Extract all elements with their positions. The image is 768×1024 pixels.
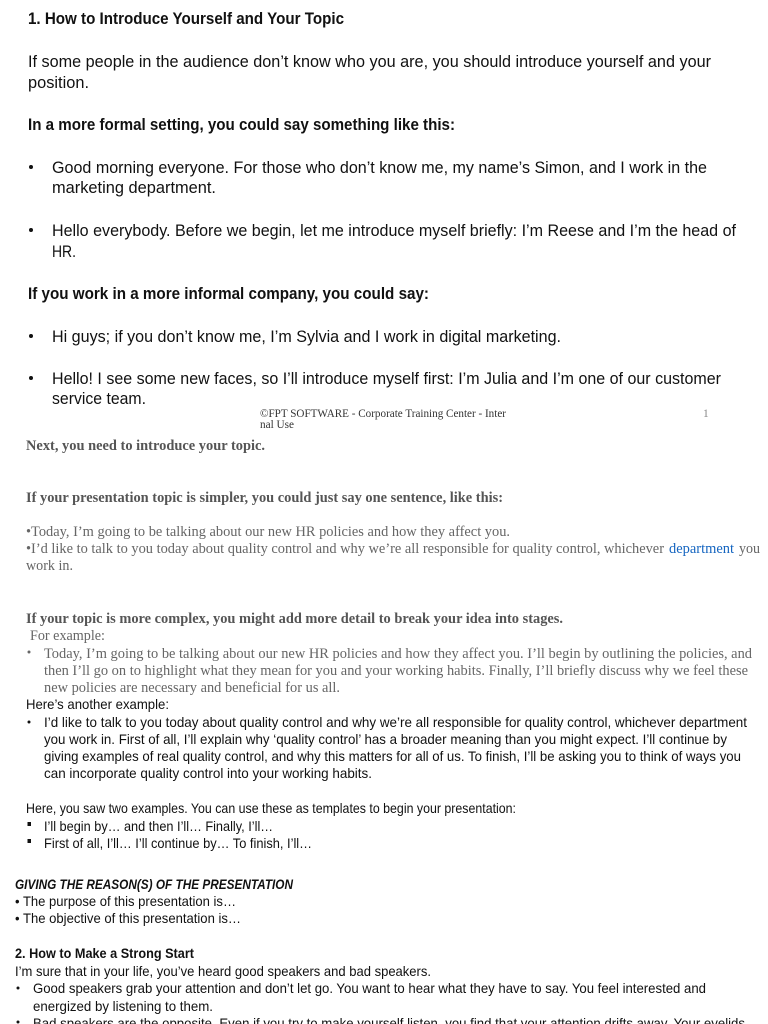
section: introducing yourself: Hi guys; if you don’t know me, I’m Sylvia and I work in digital marketing. (52, 328, 561, 346)
section: introducing yourself: HR. (52, 243, 76, 261)
section: introducing yourself: If you work in a more informal company, you could say: (28, 285, 429, 303)
section: simple topic introduction: •Today, I’m going to be talking about our new HR policies and how they affect you. (26, 524, 510, 540)
section: simple topic introduction: department (669, 541, 735, 557)
page footer: ©FPT SOFTWARE - Corporate Training Center - Inter (260, 408, 506, 420)
section: introducing yourself: service team. (52, 390, 146, 408)
section: simple topic introduction: If your presentation topic is simpler, you could just say one sentence, like this: (26, 490, 503, 506)
section: introducing yourself: 1. How to Introduce Yourself and Your Topic (28, 10, 344, 28)
section: giving the reasons (15, 876, 294, 926)
section: introducing yourself: If some people in the audience don’t know who you are, you should introduce yourself and your (28, 53, 711, 71)
section: complex topic introduction: Today, I’m going to be talking about our new HR policies and how they affect you. I’ll begin by outlining the policies, and (44, 646, 752, 662)
section: complex topic introduction: then I’ll go on to highlight what they mean for you and your working habits. Finally, I’ll briefly discuss why we feel these (44, 663, 748, 679)
section: complex topic introduction: For example: (30, 628, 105, 644)
page footer: nal Use (260, 419, 294, 431)
section: simple topic introduction: work in. (26, 558, 73, 574)
section: complex topic introduction: giving examples of real quality control, and why this matters for all of us. To finish, I’ll be asking you to think of ways you (44, 748, 741, 764)
section: introducing yourself: marketing department. (52, 179, 216, 197)
page footer: 1 (703, 408, 709, 420)
section: introducing yourself: position. (28, 74, 89, 92)
section: templates: I’ll begin by… and then I’ll… Finally, I’ll… (44, 818, 273, 834)
section: complex topic introduction: new policies are necessary and beneficial for us all. (44, 680, 340, 696)
section: making a strong start: I’m sure that in your life, you’ve heard good speakers and bad speakers. (15, 963, 431, 979)
section: simple topic introduction: you (739, 541, 760, 557)
section: complex topic introduction: Here’s another example: (26, 696, 169, 712)
section: complex topic introduction: I’d like to talk to you today about quality control and why we’re all responsible for quality control, whichever department (44, 714, 747, 730)
section: simple topic introduction: •I’d like to talk to you today about quality control and why we’re all responsible for quality control, whichever (26, 541, 664, 557)
section: complex topic introduction: you work in. First of all, I’ll explain why ‘quality control’ has a broader meaning than you might expect. I’ll continue by (44, 731, 727, 747)
section: complex topic introduction: If your topic is more complex, you might add more detail to break your idea into stages. (26, 611, 563, 627)
section: introducing yourself (28, 10, 736, 408)
section: introducing yourself: Hello! I see some new faces, so I’ll introduce myself first: I’m Julia and I’m one of our customer (52, 370, 721, 388)
page footer (260, 408, 709, 431)
section: introducing yourself: Hello everybody. Before we begin, let me introduce myself briefly: I’m Reese and I’m the head of (52, 222, 736, 240)
section: simple topic introduction: Next, you need to introduce your topic. (26, 438, 265, 454)
section: giving the reasons: GIVING THE REASON(S) OF THE PRESENTATION (15, 876, 294, 892)
section: making a strong start: Good speakers grab your attention and don’t let go. You want to hear what they have to say. You feel interested and (33, 980, 706, 996)
section: making a strong start: 2. How to Make a Strong Start (15, 945, 194, 961)
section: giving the reasons: • The objective of this presentation is… (15, 910, 241, 926)
section: templates: First of all, I’ll… I’ll continue by… To finish, I’ll… (44, 835, 312, 851)
section: making a strong start (15, 945, 745, 1024)
section: giving the reasons: • The purpose of this presentation is… (15, 893, 236, 909)
section: introducing yourself: In a more formal setting, you could say something like this: (28, 116, 455, 134)
section: complex topic introduction (26, 611, 752, 781)
section: complex topic introduction: can incorporate quality control into your working habits. (44, 765, 372, 781)
section: making a strong start: energized by listening to them. (33, 998, 213, 1014)
section: templates: Here, you saw two examples. You can use these as templates to begin your presentation: (26, 800, 516, 816)
section: simple topic introduction (26, 438, 760, 574)
section: templates (26, 800, 516, 851)
section: introducing yourself: Good morning everyone. For those who don’t know me, my name’s Simon, and I work in the (52, 159, 707, 177)
